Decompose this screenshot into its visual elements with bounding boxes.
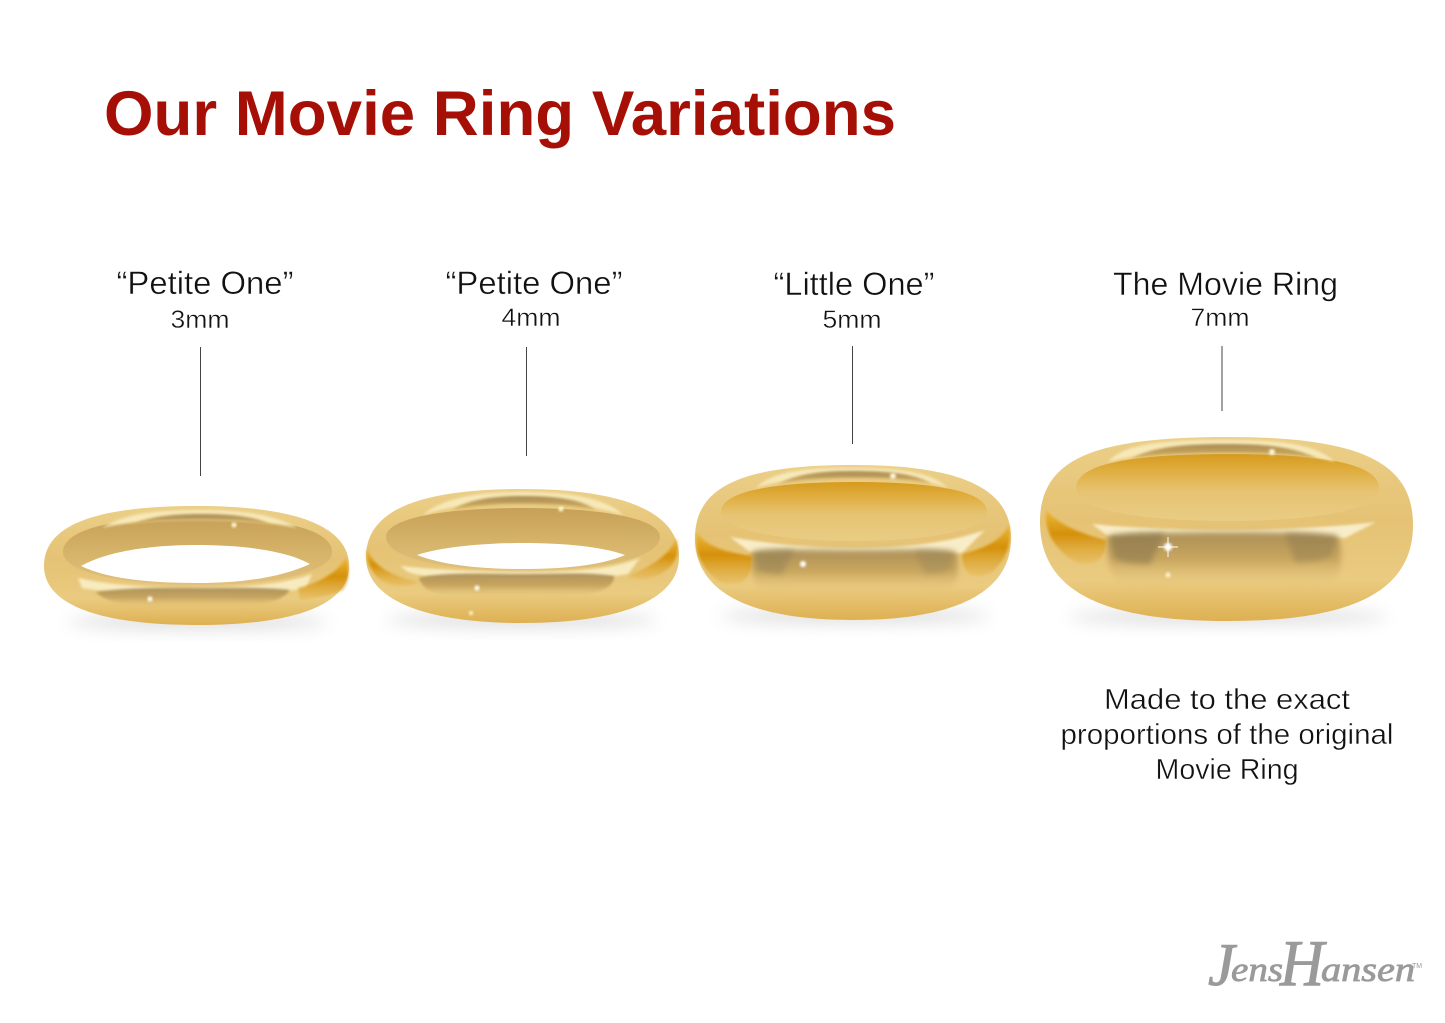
logo: Jens Hansen: H bbox=[1279, 927, 1327, 1000]
column: 3mm Petite One bbox=[44, 265, 349, 629]
title: Our Movie Ring Variations bbox=[104, 79, 896, 149]
description text: Made to the exact bbox=[1104, 684, 1350, 716]
pointer line bbox=[852, 346, 854, 444]
pointer line bbox=[1221, 346, 1223, 411]
label: Little One 5mm: 5mm bbox=[822, 306, 882, 334]
label: The Movie Ring 7mm: The Movie Ring bbox=[1113, 266, 1338, 302]
ring: 3mm bbox=[44, 506, 349, 629]
logo: Jens Hansen bbox=[1208, 927, 1422, 1000]
description text bbox=[1060, 684, 1394, 786]
label: Little One 5mm bbox=[774, 266, 934, 334]
logo: Jens Hansen: J bbox=[1208, 932, 1237, 998]
pointer line bbox=[200, 347, 202, 476]
column: 4mm Petite One bbox=[366, 265, 679, 627]
label: Petite One 3mm: 3mm bbox=[170, 306, 230, 334]
column: 7mm The Movie Ring bbox=[1040, 266, 1413, 786]
description text: Movie Ring bbox=[1156, 754, 1298, 786]
column: 5mm Little One bbox=[695, 266, 1011, 623]
label: Petite One 4mm: “Petite One” bbox=[446, 265, 622, 301]
ring: 7mm bbox=[1040, 437, 1413, 624]
label: The Movie Ring 7mm: 7mm bbox=[1190, 304, 1250, 332]
ring: 5mm bbox=[695, 465, 1011, 623]
label: Petite One 4mm bbox=[446, 265, 622, 332]
pointer line bbox=[526, 347, 528, 456]
label: Petite One 4mm: 4mm bbox=[502, 304, 560, 332]
label: Little One 5mm: “Little One” bbox=[774, 266, 934, 302]
logo: Jens Hansen: ens bbox=[1231, 950, 1283, 989]
label: The Movie Ring 7mm bbox=[1113, 266, 1338, 332]
label: Petite One 3mm bbox=[116, 265, 294, 334]
description text: proportions of the original bbox=[1060, 719, 1394, 751]
logo: Jens Hansen: ansen bbox=[1321, 950, 1415, 989]
ring: 4mm bbox=[366, 489, 679, 627]
label: Petite One 3mm: “Petite One” bbox=[116, 265, 294, 301]
logo: Jens Hansen: TM bbox=[1412, 963, 1422, 970]
